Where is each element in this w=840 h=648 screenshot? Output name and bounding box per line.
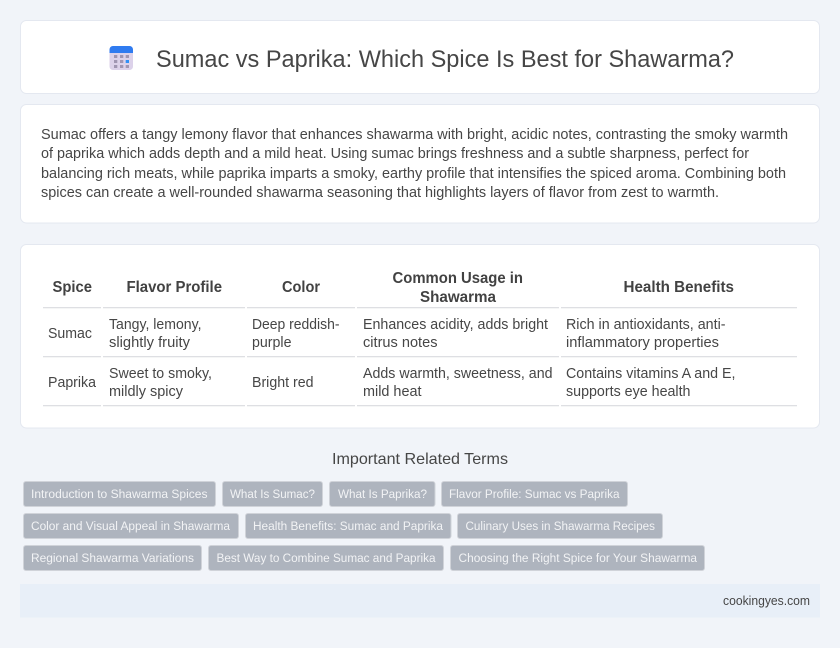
table row: Sumac: slightly fruity	[109, 335, 191, 351]
table header row: Health Benefits	[624, 279, 734, 296]
tag list: related terms: Color and Visual Appeal in Shawarma	[31, 519, 230, 533]
tag list: related terms: Culinary Uses in Shawarma Recipes	[466, 519, 655, 533]
table row: Paprika: supports eye health	[566, 384, 690, 400]
table row: Sumac: Deep reddish-	[252, 317, 340, 333]
tag list: related terms: What Is Sumac?	[230, 487, 315, 501]
text block: intro paragraph: spices can create a well-rounded shawarma seasoning that highlights layers of flavor from zest to warmth.	[41, 185, 719, 201]
table row: Paprika: mildly spicy	[109, 384, 184, 400]
footer	[20, 584, 820, 618]
tag list: related terms	[24, 482, 704, 570]
table row: Paprika: Contains vitamins A and E,	[566, 366, 736, 382]
text block: intro paragraph: Sumac offers a tangy lemony flavor that enhances shawarma with bright, acidic notes, contrasting the smoky warmth	[41, 127, 788, 143]
table row: Sumac: purple	[252, 335, 292, 351]
table row: Sumac: Enhances acidity, adds bright	[363, 317, 548, 333]
table row: Sumac: citrus notes	[363, 335, 438, 351]
table row: Sumac: Tangy, lemony,	[109, 317, 202, 333]
text block: intro paragraph: of paprika which adds depth and a mild heat. Using sumac brings freshness and a subtle sharpness, perfect for	[41, 146, 749, 162]
tag list: related terms: Choosing the Right Spice for Your Shawarma	[458, 551, 697, 565]
tag list: related terms: Health Benefits: Sumac and Paprika	[253, 519, 443, 533]
text block: intro paragraph: balancing rich meats, while paprika imparts a smoky, earthy profile that intensifies the spiced aroma. Combining both	[41, 166, 786, 182]
panel: title header	[20, 20, 820, 94]
table row: Sumac: Sumac	[48, 326, 92, 342]
icon: calendar	[110, 46, 133, 70]
text block: intro paragraph	[41, 127, 788, 201]
table row: Sumac: inflammatory properties	[566, 335, 719, 351]
table header row: Spice	[52, 279, 92, 296]
table row: Paprika: Bright red	[252, 375, 314, 391]
table row: Sumac	[48, 317, 726, 351]
tag list: related terms: Best Way to Combine Sumac and Paprika	[216, 551, 436, 565]
panel: introduction	[20, 104, 820, 223]
table row: Paprika: Paprika	[48, 375, 97, 391]
table row: Paprika: Adds warmth, sweetness, and	[363, 366, 552, 382]
title: Sumac vs Paprika: Which Spice Is Best for Shawarma?	[156, 46, 734, 73]
table header row	[52, 270, 734, 306]
heading: related terms: Important Related Terms	[332, 451, 508, 468]
table row: Paprika: mild heat	[363, 384, 422, 400]
table header row: Flavor Profile	[126, 279, 222, 296]
tag list: related terms: Regional Shawarma Variations	[31, 551, 194, 565]
table header row: Color	[282, 279, 320, 296]
table header row: Common Usage in	[392, 270, 523, 287]
table row: Paprika	[48, 366, 736, 400]
tag list: related terms: Flavor Profile: Sumac vs Paprika	[449, 487, 620, 501]
panel: comparison table	[20, 244, 820, 428]
table row: Sumac: Rich in antioxidants, anti-	[566, 317, 726, 333]
table header row: Shawarma	[420, 289, 496, 306]
footer: cookingyes.com	[723, 594, 810, 608]
table row: Paprika: Sweet to smoky,	[109, 366, 212, 382]
tag list: related terms: Introduction to Shawarma Spices	[31, 487, 208, 501]
tag list: related terms: What Is Paprika?	[338, 487, 427, 501]
